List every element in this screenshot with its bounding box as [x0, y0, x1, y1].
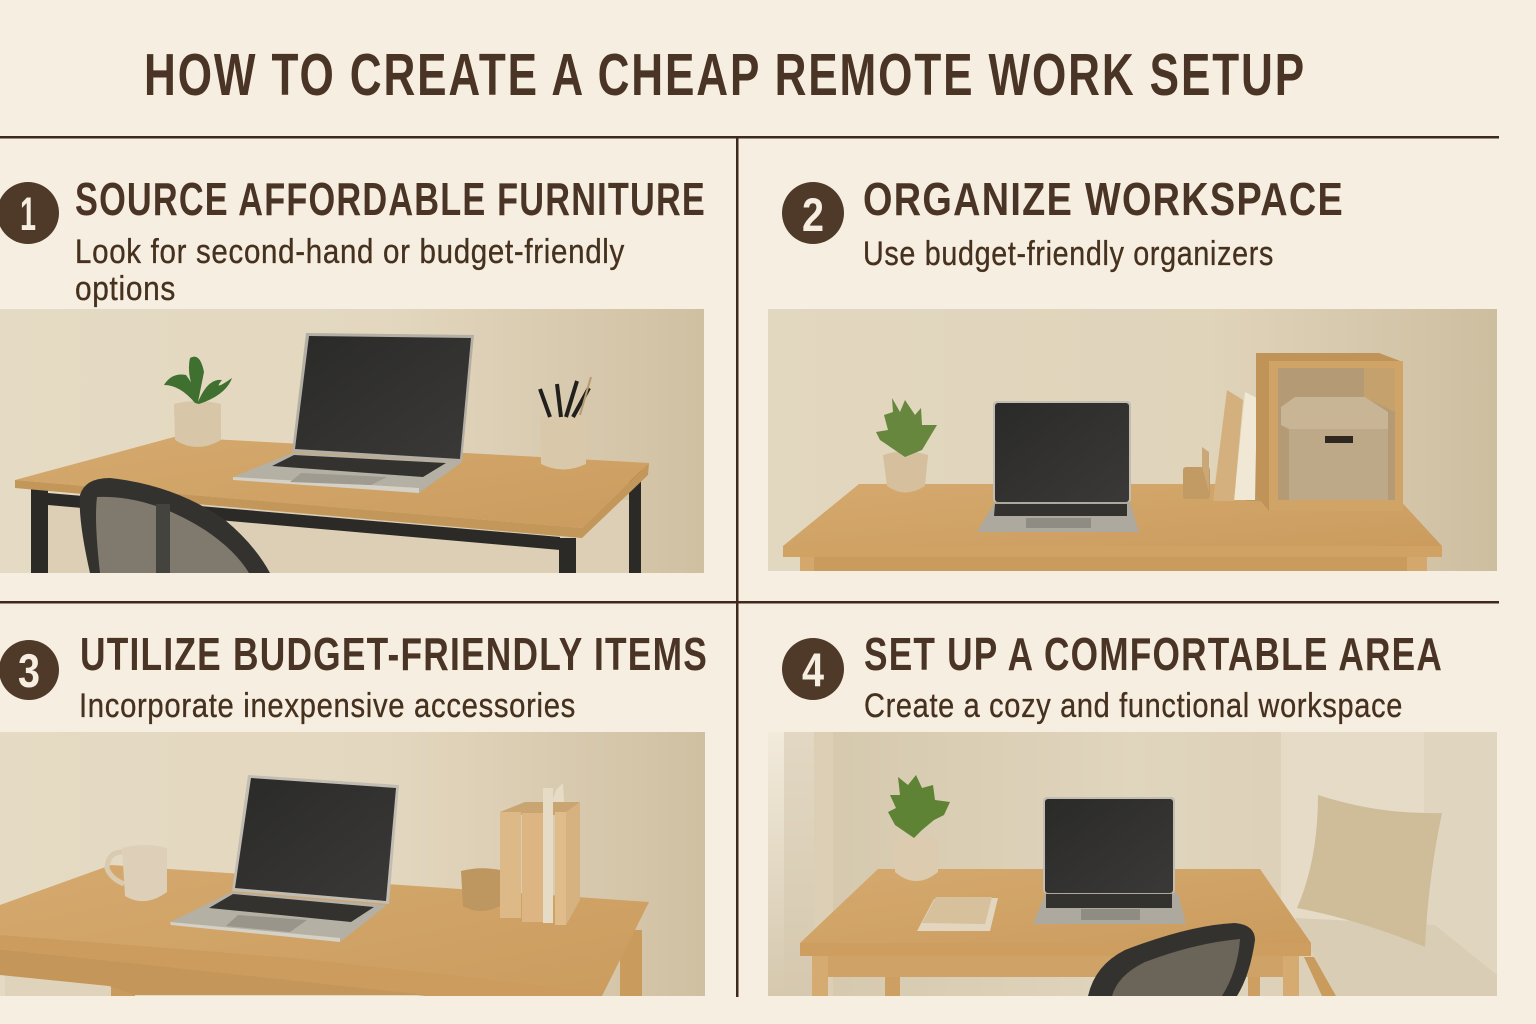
desk with metal legs — [15, 437, 649, 573]
step 1 heading: SOURCE AFFORDABLE FURNITURE — [75, 173, 706, 225]
step 4 number badge — [782, 638, 844, 700]
step 3 number badge — [0, 640, 59, 700]
panel: step 3 — [0, 628, 708, 996]
laptop — [170, 775, 399, 942]
step 1 description: options — [75, 270, 176, 308]
step 1 number badge: 1 — [20, 187, 36, 240]
laptop — [1033, 797, 1186, 924]
step 3 heading: UTILIZE BUDGET-FRIENDLY ITEMS — [80, 628, 708, 680]
laptop — [977, 401, 1139, 532]
cushion — [1297, 795, 1442, 947]
step 1 number badge — [0, 182, 59, 244]
step 4 number badge: 4 — [802, 643, 824, 696]
panel: step 4 — [768, 628, 1497, 996]
step 3 description: Incorporate inexpensive accessories — [79, 687, 576, 725]
step 2 number badge: 2 — [802, 188, 824, 241]
notebooks — [917, 897, 998, 931]
desk — [800, 869, 1336, 996]
books — [500, 783, 580, 925]
step 1 photo — [0, 309, 704, 573]
plant in pot — [876, 398, 937, 492]
step 2 heading: ORGANIZE WORKSPACE — [863, 173, 1344, 225]
step 4 description: Create a cozy and functional workspace — [864, 687, 1403, 725]
panel: step 2 — [768, 173, 1497, 571]
step 3 number badge: 3 — [18, 644, 40, 697]
books — [1213, 390, 1268, 501]
desk — [783, 484, 1442, 571]
wooden cube shelf with storage box — [1256, 353, 1403, 511]
desk — [0, 865, 649, 996]
mesh chair — [80, 478, 270, 573]
step 2 photo — [768, 309, 1497, 571]
mesh chair — [1088, 923, 1255, 996]
step 4 photo — [768, 732, 1497, 996]
step 2 description: Use budget-friendly organizers — [863, 235, 1274, 273]
step 1 description: Look for second-hand or budget-friendly — [75, 233, 625, 271]
cork cup — [461, 868, 500, 911]
panel: step 1 — [0, 173, 706, 573]
step 2 number badge — [782, 182, 844, 244]
plant in pot — [888, 775, 950, 881]
small cork cup — [1183, 447, 1210, 499]
step 3 photo — [0, 732, 705, 996]
mug — [107, 845, 167, 901]
plant in pot — [164, 357, 232, 447]
laptop — [233, 333, 474, 493]
pencil cup — [540, 377, 591, 470]
curtain — [768, 732, 833, 996]
